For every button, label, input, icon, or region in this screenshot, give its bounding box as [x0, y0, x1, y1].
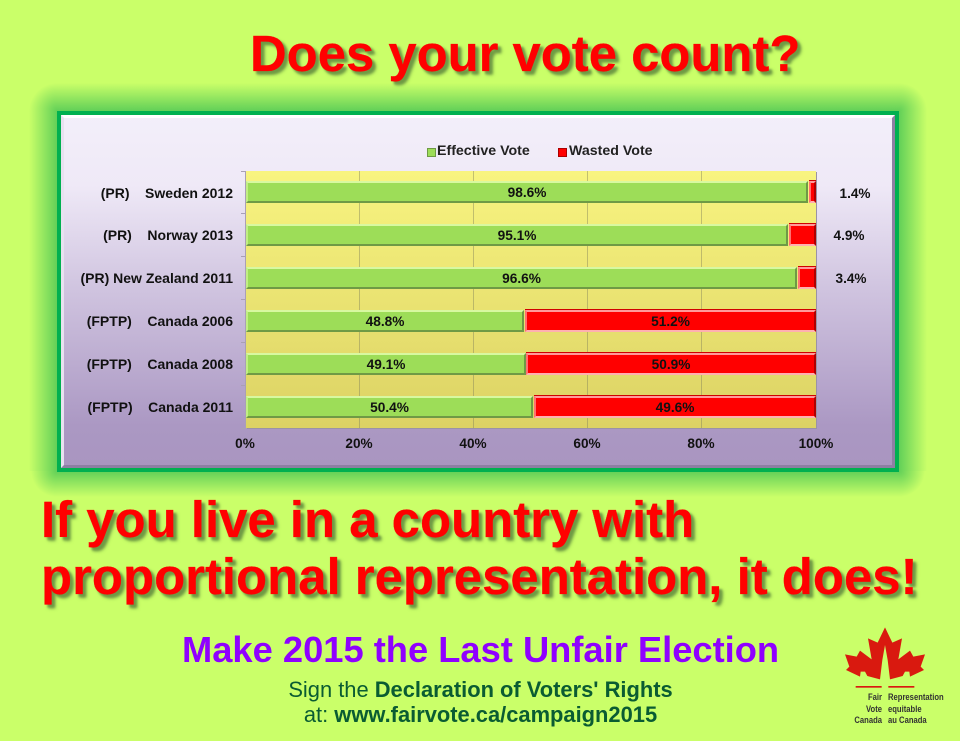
bar chart: (PR) New Zealand 2011 — [80, 270, 233, 286]
logo text left: Fair — [868, 692, 882, 702]
bar chart: 3.4% — [836, 271, 866, 286]
title: Does your vote count? — [250, 25, 800, 82]
row: Canada 2011 — [88, 395, 816, 418]
bar chart: 4.9% — [834, 228, 864, 243]
logo text right: au Canada — [888, 715, 927, 725]
bar chart: (PR) Norway 2013 — [103, 227, 233, 243]
row: Canada 2008 — [87, 352, 816, 375]
glow around chart card — [31, 85, 925, 495]
bar chart: 96.6% — [502, 270, 541, 286]
bar chart: 50.4% — [370, 400, 409, 414]
call to action — [288, 677, 673, 727]
bar chart: (PR) Sweden 2012 — [101, 185, 233, 201]
bar chart: 95.1% — [498, 228, 536, 242]
bar chart: (FPTP) Canada 2008 — [87, 356, 233, 372]
slogan: Make 2015 the Last Unfair Election — [182, 629, 779, 670]
bar chart: 49.6% — [656, 400, 694, 414]
bar chart: (FPTP) Canada 2006 — [87, 313, 233, 329]
bar chart: 51.2% — [651, 314, 690, 328]
x axis labels: 60% — [573, 436, 601, 451]
logo text left: Canada — [854, 715, 882, 725]
icon: maple leaf — [845, 628, 925, 688]
row: Norway — [103, 223, 864, 246]
call to action: at: www.fairvote.ca/campaign2015 — [304, 702, 657, 727]
bar chart: 49.1% — [367, 356, 405, 372]
bar chart — [80, 143, 870, 451]
x axis labels: 80% — [687, 436, 715, 451]
legend: Effective Vote — [437, 143, 530, 159]
logo text left — [854, 692, 882, 725]
x axis labels: 0% — [235, 436, 255, 451]
call to action: Sign the Declaration of Voters' Rights — [288, 677, 673, 702]
bar chart: (FPTP) Canada 2011 — [88, 399, 233, 415]
bar chart: 1.4% — [840, 186, 870, 201]
logo text right — [888, 692, 944, 725]
bar chart: 98.6% — [508, 184, 546, 200]
plot area — [246, 171, 816, 428]
bar chart: 50.9% — [652, 356, 690, 372]
x axis labels: 100% — [799, 436, 833, 451]
conclusion text — [41, 491, 918, 610]
row: Canada 2006 — [87, 309, 816, 332]
x axis labels: 40% — [459, 436, 487, 451]
legend: Wasted Vote — [569, 143, 653, 159]
row: New Zealand — [80, 266, 866, 289]
logo text right: equitable — [888, 704, 922, 714]
conclusion text: proportional representation, it does! — [41, 548, 918, 605]
logo text right: Representation — [888, 692, 944, 702]
bar chart: 48.8% — [366, 314, 404, 328]
x axis labels — [235, 436, 833, 451]
logo text left: Vote — [866, 704, 882, 714]
row: Sweden — [101, 180, 870, 203]
x axis labels: 20% — [345, 436, 373, 451]
logo: Fair Vote Canada — [845, 628, 944, 725]
panel: chart card — [57, 111, 899, 472]
legend — [427, 143, 653, 159]
conclusion text: If you live in a country with — [41, 491, 694, 548]
